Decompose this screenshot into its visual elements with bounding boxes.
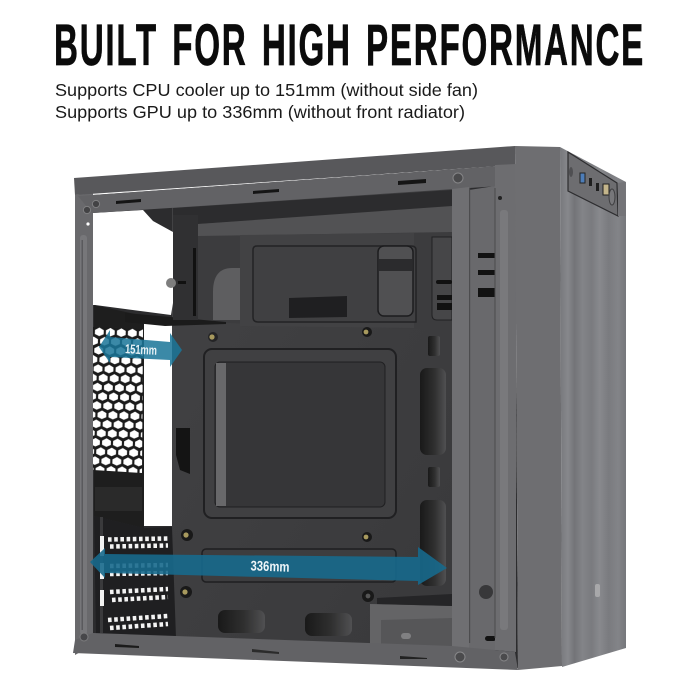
bottom frame band	[73, 633, 518, 670]
top frame band	[78, 165, 515, 214]
bracket above mesh	[125, 313, 226, 326]
side clip	[176, 428, 190, 474]
arrow: 336mm	[90, 547, 447, 585]
front panel face	[515, 146, 562, 670]
white strip beside expansion panel	[144, 322, 172, 526]
front I/O panel	[568, 152, 626, 216]
arrow: 151mm	[99, 330, 182, 367]
drive cage	[370, 594, 452, 647]
label: 151mm: 151mm	[125, 341, 157, 358]
upper raised plate	[240, 233, 416, 328]
cable routing cutouts	[218, 336, 446, 636]
label: 336mm: 336mm	[250, 557, 290, 575]
vertical rear bracket	[166, 215, 198, 320]
left rail	[75, 193, 93, 655]
computer case	[73, 146, 626, 670]
upper shroud cutout	[213, 268, 240, 320]
top interior shelf	[173, 190, 452, 300]
text block: specifications: Supports GPU up to 336mm (without front radiator)	[55, 102, 465, 122]
pillar slots	[478, 253, 504, 641]
central motherboard recess	[204, 349, 396, 518]
case interior wall	[93, 165, 518, 668]
front pillar	[452, 187, 469, 649]
text block: specifications	[55, 80, 478, 122]
side panel with brushed ribs	[560, 147, 626, 667]
text block: specifications: Supports CPU cooler up to 151mm (without side fan)	[55, 80, 478, 100]
expansion slot covers	[94, 516, 176, 638]
rear fan mesh panel	[93, 305, 144, 528]
white opening behind case	[93, 210, 173, 315]
standoff screws	[180, 327, 374, 602]
lower recess	[202, 549, 396, 582]
right side slot plate	[432, 237, 452, 320]
small mark on side panel	[595, 584, 600, 597]
outer front strip	[494, 164, 516, 652]
top lid rail	[74, 146, 515, 195]
